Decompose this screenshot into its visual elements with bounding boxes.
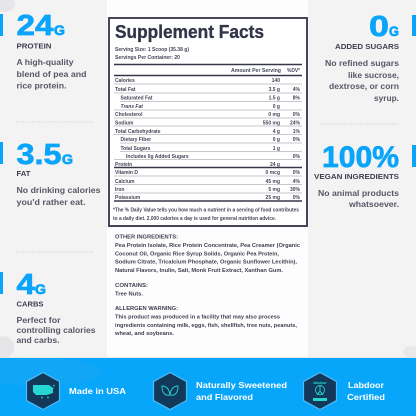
column headers: %DV* xyxy=(287,68,300,74)
nutrition table rows: Dietary Fiber xyxy=(120,137,151,143)
nutrition table rows: Saturated Fat xyxy=(120,96,153,102)
panel: vegan stat: whatsoever. xyxy=(348,199,399,209)
icon: leaves hexagon xyxy=(154,372,186,410)
nutrition table rows: 5 mg xyxy=(268,187,280,193)
serving information: Servings Per Container: 20 xyxy=(115,55,180,61)
nutrition table rows: Trans Fat xyxy=(120,104,143,110)
panel: carbs stat: Perfect for xyxy=(16,315,61,325)
panel: vegan stat: 100% xyxy=(322,141,399,174)
nutrition table rows: Vitamin D xyxy=(115,170,138,176)
text block: allergen warning xyxy=(114,306,298,337)
text block: allergen warning: wheat, and soybeans. xyxy=(114,331,175,337)
serving information xyxy=(115,47,189,61)
text block: other ingredients: Sodium Citrate, Tricalcium Phosphate, Organic Sunflower Lecithin), xyxy=(115,260,298,266)
panel: vegan stat xyxy=(314,141,416,209)
panel: carbs stat: controlling calories xyxy=(16,325,96,335)
badge: labdoor certified: Labdoor xyxy=(348,380,385,390)
nutrition table rows xyxy=(114,78,302,201)
text block: other ingredients: Coconut Oil, Organic Rice Syrup Solids, Organic Pea Protein, xyxy=(115,252,280,258)
footnote: *The % Daily Value tells you how much a nutrient in a serving of food contributes xyxy=(113,208,299,214)
panel: vegan stat: No animal products xyxy=(318,188,399,198)
nutrition table rows: Protein xyxy=(115,162,132,168)
panel: protein stat xyxy=(0,10,86,90)
panel: fat stat: 3.5 xyxy=(16,139,61,171)
nutrition table rows: Total Carbohydrate xyxy=(115,129,161,135)
panel: added sugars stat: No refined sugars xyxy=(325,58,399,68)
nutrition table rows: 24 g xyxy=(270,162,280,168)
footnote: to a daily diet. 2,000 calories a day is used for general nutrition advice. xyxy=(113,216,277,222)
nutrition table rows: 0% xyxy=(293,137,301,143)
nutrition table rows: Total Fat xyxy=(115,87,136,93)
badge: naturally sweetened: Naturally Sweetened xyxy=(196,380,287,390)
badge: labdoor certified xyxy=(304,372,385,410)
panel: added sugars stat: G xyxy=(389,24,399,39)
nutrition table rows: Sodium xyxy=(115,120,134,126)
panel: blue footer band xyxy=(0,357,416,416)
panel: fat stat: G xyxy=(62,152,73,167)
panel: carbs stat xyxy=(0,269,96,345)
nutrition table rows: 4 g xyxy=(273,129,280,135)
nutrition table rows: Iron xyxy=(115,187,124,193)
panel: fat stat: No drinking calories xyxy=(16,185,101,195)
nutrition table rows: Calories xyxy=(115,78,135,84)
panel: protein stat: blend of pea and xyxy=(16,69,86,79)
panel: added sugars stat: dextrose, or corn xyxy=(329,81,399,91)
nutrition table rows: Includes 0g Added Sugars xyxy=(126,154,189,160)
nutrition table rows: 45 mg xyxy=(266,179,280,185)
badge: naturally sweetened xyxy=(154,372,287,410)
nutrition table rows: 140 xyxy=(272,78,280,84)
text block: contains: CONTAINS: xyxy=(115,283,148,289)
nutrition table rows: 1 g xyxy=(273,146,280,152)
panel: fat stat: you'd rather eat. xyxy=(16,197,86,207)
text block: other ingredients: Pea Protein Isolate, Rice Protein Concentrate, Pea Creamer (Organic xyxy=(115,243,300,249)
nutrition table rows: 0 mg xyxy=(268,112,280,118)
nutrition table rows: 8% xyxy=(293,96,301,102)
panel: protein stat: A high-quality xyxy=(16,57,74,67)
nutrition table rows: 0% xyxy=(293,195,301,201)
badge: naturally sweetened: and Flavored xyxy=(196,392,253,402)
nutrition table rows: 1.5 g xyxy=(269,96,280,102)
nutrition table rows: 1% xyxy=(293,129,301,135)
panel: carbs stat: and carbs. xyxy=(16,335,60,345)
nutrition table rows: Potassium xyxy=(115,195,141,201)
nutrition table rows: 0% xyxy=(293,154,301,160)
nutrition table rows: Cholesterol xyxy=(115,112,143,118)
panel: added sugars stat: 0 xyxy=(369,11,389,43)
heading: supplement facts: Supplement Facts xyxy=(115,21,264,42)
panel: fat stat: FAT xyxy=(16,169,31,178)
nutrition table rows: 30% xyxy=(290,187,301,193)
nutrition table rows: 25 mg xyxy=(266,195,280,201)
panel: protein stat: 24 xyxy=(16,10,54,42)
nutrition table rows: 4% xyxy=(293,87,301,93)
text block: allergen warning: ingredients containing milk, eggs, fish, shellfish, tree nuts, peanuts, xyxy=(115,323,298,329)
nutrition table rows: Total Sugars xyxy=(120,146,151,152)
text block: other ingredients: Natural Flavors, Inulin, Salt, Monk Fruit Extract, Xanthan Gum. xyxy=(115,268,284,274)
text block: contains xyxy=(115,283,148,298)
column headers xyxy=(231,68,300,74)
nutrition table rows: 0% xyxy=(293,170,301,176)
nutrition table rows: 24% xyxy=(290,120,301,126)
nutrition table rows: 0% xyxy=(293,112,301,118)
panel: protein stat: PROTEIN xyxy=(16,42,52,50)
badge: made in USA: Made in USA xyxy=(69,386,126,396)
column headers: Amount Per Serving xyxy=(231,68,281,74)
text block: other ingredients xyxy=(115,234,300,274)
nutrition table rows: 0 mcg xyxy=(266,170,280,176)
serving information: Serving Size: 1 Scoop (35.38 g) xyxy=(115,47,189,53)
footnote xyxy=(113,208,299,222)
nutrition table rows: 550 mg xyxy=(263,120,280,126)
panel: protein stat: rice protein. xyxy=(16,80,66,90)
panel: carbs stat: CARBS xyxy=(16,300,44,308)
panel: supplement facts label xyxy=(109,18,307,226)
panel: added sugars stat xyxy=(325,11,416,103)
text block: other ingredients: OTHER INGREDIENTS: xyxy=(115,234,178,240)
panel: added sugars stat: syrup. xyxy=(374,93,399,103)
text block: allergen warning: This product was produced in a facility that may also process xyxy=(115,314,280,320)
icon: USA cart hexagon xyxy=(26,372,60,410)
panel: vegan stat: VEGAN INGREDIENTS xyxy=(314,172,399,181)
nutrition table rows: 4% xyxy=(293,179,301,185)
panel: fat stat xyxy=(0,139,101,207)
panel: added sugars stat: like sucrose, xyxy=(348,70,399,80)
panel: added sugars stat: ADDED SUGARS xyxy=(335,42,399,51)
nutrition table rows: 3.5 g xyxy=(269,87,280,93)
nutrition table rows: Calcium xyxy=(115,179,135,185)
panel: carbs stat: G xyxy=(35,282,46,297)
badge: labdoor certified: Certified xyxy=(347,392,385,402)
panel: carbs stat: 4 xyxy=(16,269,35,301)
text block: allergen warning: ALLERGEN WARNING: xyxy=(115,306,178,312)
nutrition table rows: 0 g xyxy=(273,137,280,143)
panel: protein stat: G xyxy=(54,23,65,38)
nutrition table rows: 0 g xyxy=(273,104,280,110)
text block: contains: Tree Nuts. xyxy=(115,292,144,298)
badge: made in USA xyxy=(26,372,126,410)
icon: labdoor hexagon: labdoor xyxy=(313,381,327,385)
